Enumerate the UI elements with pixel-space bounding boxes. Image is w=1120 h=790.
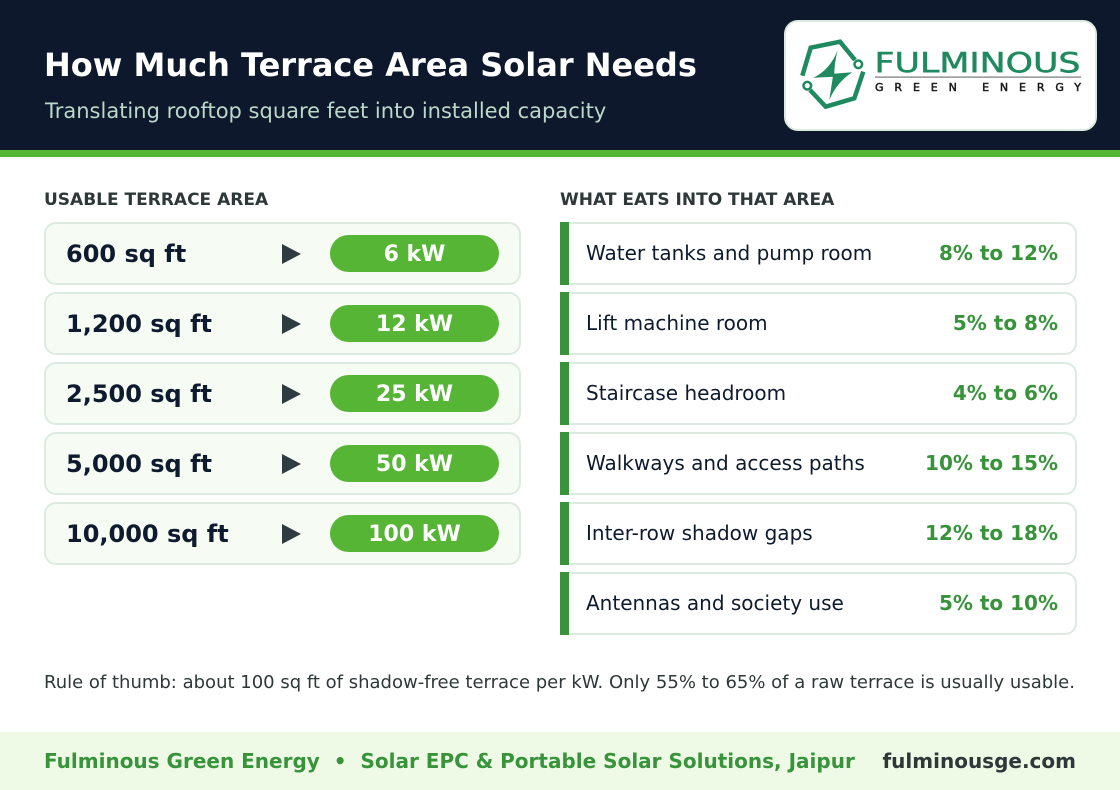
row walkways (560, 432, 1077, 495)
header band (0, 0, 1120, 157)
row water tanks: 8% to 12% (939, 241, 1058, 265)
panel: area losses (560, 222, 1077, 635)
row staircase: Staircase headroom (586, 381, 786, 405)
row 1200: 1,200 sq ft (66, 310, 212, 338)
row antennas: 5% to 10% (939, 591, 1058, 615)
row 600: 600 sq ft (66, 240, 186, 268)
title: How Much Terrace Area Solar Needs (44, 46, 697, 84)
logo (800, 39, 1082, 110)
row walkways: 10% to 15% (925, 451, 1058, 475)
row staircase (560, 362, 1077, 425)
row 5000 (44, 432, 521, 495)
row 10000: 100 kW (368, 522, 461, 547)
row 5000: 5,000 sq ft (66, 450, 212, 478)
row 600: 6 kW (384, 242, 445, 267)
subtitle: Translating rooftop square feet into installed capacity (45, 99, 606, 123)
row 5000: 50 kW (376, 452, 453, 477)
tagline: GREEN ENERGY (875, 81, 1081, 94)
row antennas: Antennas and society use (586, 591, 844, 615)
row 2500: 2,500 sq ft (66, 380, 212, 408)
rule of thumb note: Rule of thumb: about 100 sq ft of shadow-free terrace per kW. Only 55% to 65% of a raw terrace is usually usable. (44, 672, 1075, 693)
footer website: fulminousge.com (882, 749, 1076, 773)
wordmark: FULMINOUS (874, 47, 1080, 79)
icon: hexagon bolt (802, 42, 863, 107)
row lift: 5% to 8% (953, 311, 1058, 335)
row antennas (560, 572, 1077, 635)
row water tanks: Water tanks and pump room (586, 241, 872, 265)
logo card (784, 20, 1097, 131)
row water tanks (560, 222, 1077, 285)
row 10000: 10,000 sq ft (66, 520, 229, 548)
row shadow gaps: 12% to 18% (925, 521, 1058, 545)
row staircase: 4% to 6% (953, 381, 1058, 405)
row shadow gaps (560, 502, 1077, 565)
row 1200 (44, 292, 521, 355)
row 10000 (44, 502, 521, 565)
footer company: Fulminous Green Energy • Solar EPC & Portable Solar Solutions, Jaipur (44, 749, 855, 773)
row lift (560, 292, 1077, 355)
row 2500 (44, 362, 521, 425)
row 600 (44, 222, 521, 285)
row 2500: 25 kW (376, 382, 453, 407)
panel: area rows (44, 222, 521, 565)
row shadow gaps: Inter-row shadow gaps (586, 521, 813, 545)
heading: what eats into that area: WHAT EATS INTO THAT AREA (560, 190, 834, 210)
row lift: Lift machine room (586, 311, 768, 335)
footer band (0, 732, 1120, 790)
row walkways: Walkways and access paths (586, 451, 865, 475)
heading: usable terrace area: USABLE TERRACE AREA (44, 190, 268, 210)
row 1200: 12 kW (376, 312, 453, 337)
